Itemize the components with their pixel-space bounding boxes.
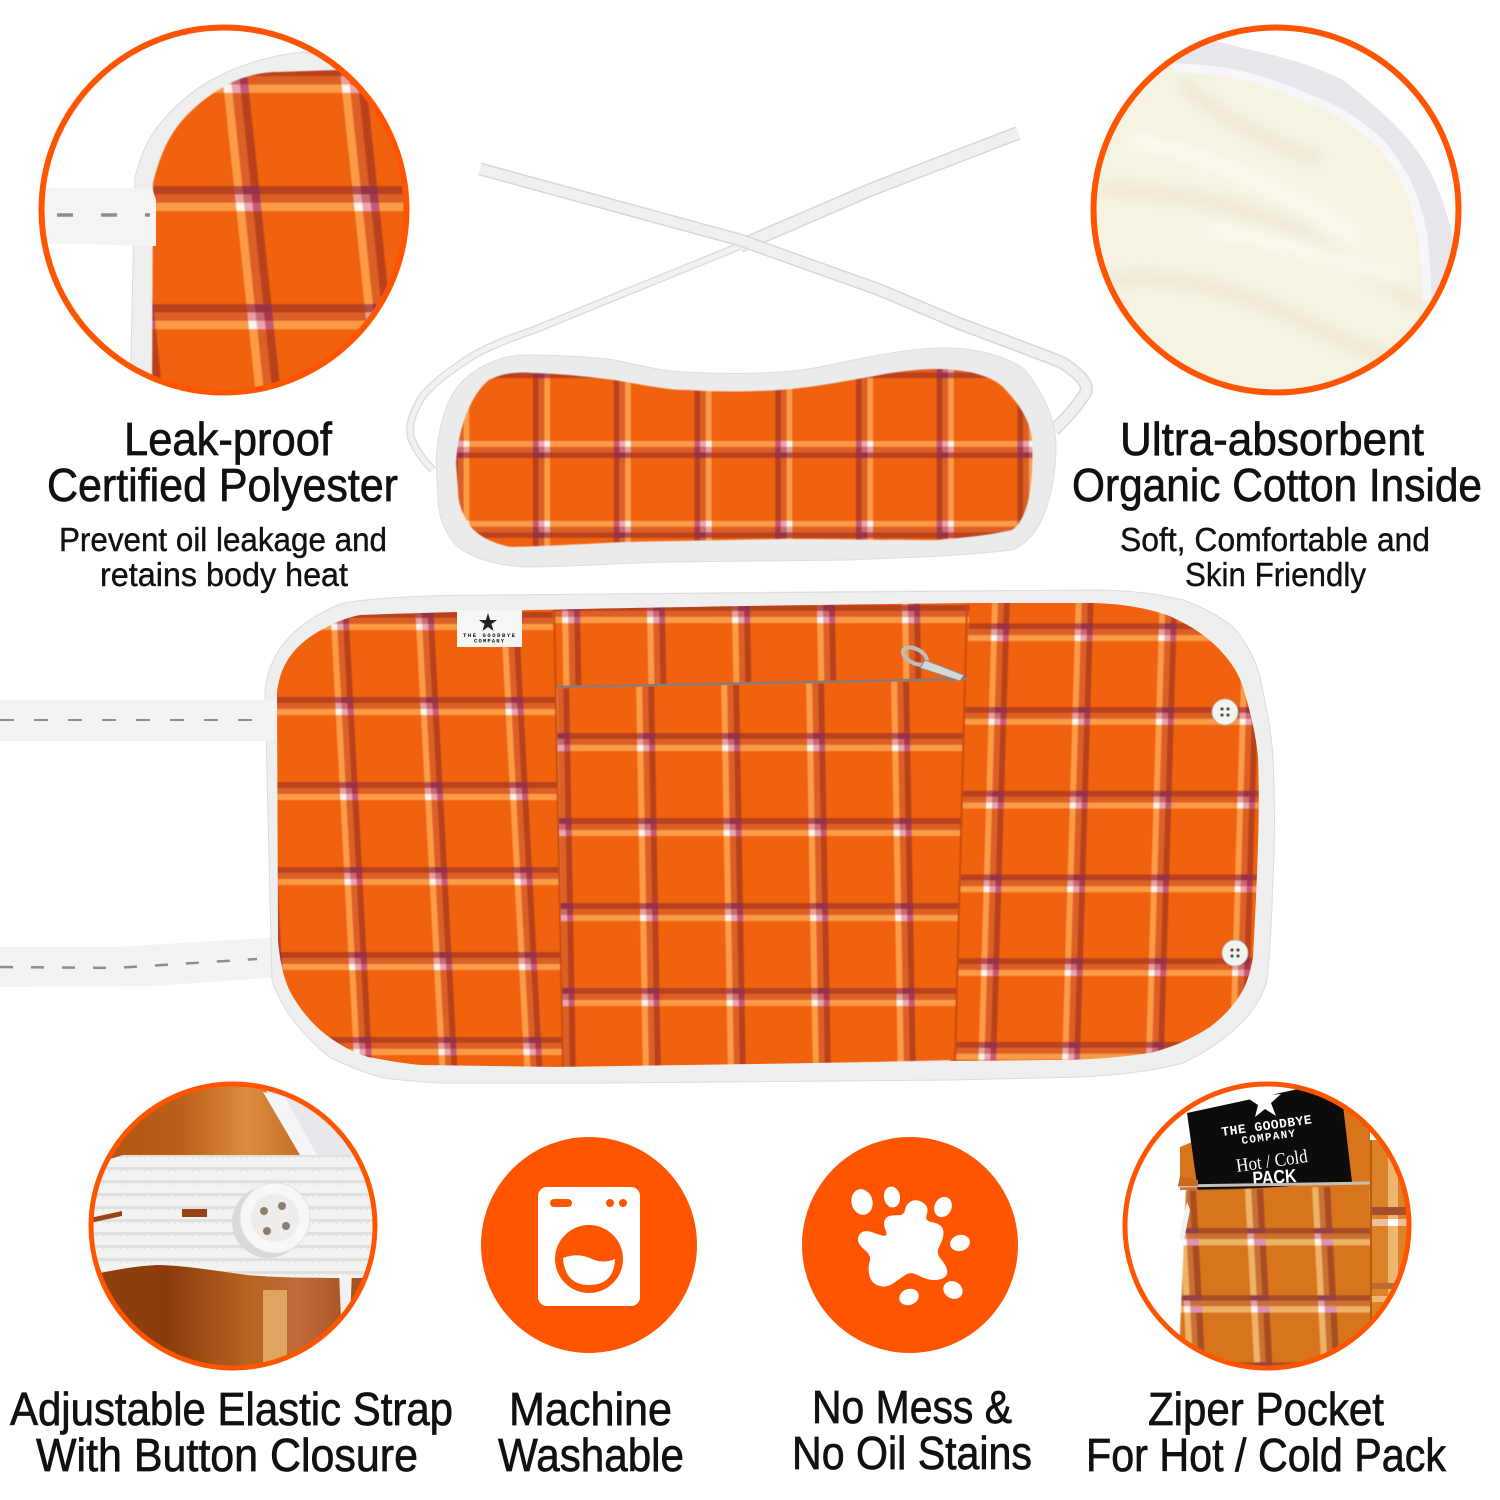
heading: zipper pocket: Ziper Pocket xyxy=(1148,1383,1384,1435)
heading: no mess no oil stains xyxy=(792,1381,1032,1479)
heading: leak-proof polyester: Certified Polyester xyxy=(47,459,398,511)
heading: machine washable: Machine xyxy=(509,1383,672,1435)
small belt binding xyxy=(436,348,1056,567)
text: polyester description: Prevent oil leakage and xyxy=(59,521,387,558)
heading: zipper pocket: For Hot / Cold Pack xyxy=(1086,1429,1447,1481)
text: polyester description: retains body heat xyxy=(100,556,348,593)
text: cotton description xyxy=(1120,521,1430,593)
sewn brand label: COMPANY xyxy=(474,638,505,644)
black cold pack card: COMPANY xyxy=(1241,1129,1296,1148)
zipper pull xyxy=(900,644,964,681)
strap: lower elastic xyxy=(0,937,282,987)
heading: no mess no oil stains: No Mess & xyxy=(812,1381,1012,1433)
white binding xyxy=(265,590,1274,1083)
black cold pack card xyxy=(1187,1080,1352,1192)
button bottom xyxy=(1222,940,1248,966)
icon: washing machine xyxy=(481,1137,697,1353)
heading: ultra-absorbent cotton xyxy=(1072,413,1482,511)
text: cotton description: Soft, Comfortable and xyxy=(1120,521,1430,558)
heading: leak-proof polyester xyxy=(47,413,398,511)
text: polyester description xyxy=(59,521,387,593)
strap joins over binding xyxy=(262,700,280,741)
strap: upper elastic xyxy=(0,700,282,741)
callout circle: elastic strap and button xyxy=(85,1080,385,1380)
heading: zipper pocket xyxy=(1086,1383,1447,1481)
callout circle: polyester detail xyxy=(30,20,430,400)
heading: leak-proof polyester: Leak-proof xyxy=(124,413,332,465)
heading: machine washable: Washable xyxy=(498,1429,684,1481)
callout circle: organic cotton detail xyxy=(1085,20,1480,400)
sewn brand label: THE GOODBYE xyxy=(463,632,516,639)
plaid fabric panels xyxy=(270,600,1270,1080)
icon: oil splat xyxy=(802,1137,1018,1353)
ties xyxy=(410,133,1086,470)
photo: main open belt xyxy=(0,590,1274,1083)
heading: machine washable xyxy=(498,1383,684,1481)
callout circle: zipper pocket with cold pack xyxy=(1120,1080,1420,1380)
heading: adjustable elastic strap: Adjustable Elastic Strap xyxy=(10,1383,453,1435)
small belt fabric xyxy=(456,369,1032,547)
sewn brand label xyxy=(457,610,522,647)
black cold pack card: THE GOODBYE xyxy=(1220,1112,1313,1140)
photo: small belt with cross ties xyxy=(410,133,1086,567)
heading: ultra-absorbent cotton: Ultra-absorbent xyxy=(1120,413,1424,465)
button top xyxy=(1212,699,1238,725)
heading: adjustable elastic strap xyxy=(10,1383,453,1481)
heading: adjustable elastic strap: With Button Closure xyxy=(36,1429,418,1481)
zipper line xyxy=(556,679,966,687)
text: cotton description: Skin Friendly xyxy=(1185,556,1366,593)
heading: no mess no oil stains: No Oil Stains xyxy=(792,1427,1032,1479)
black cold pack card: PACK xyxy=(1252,1166,1297,1190)
black cold pack card: Hot / Cold xyxy=(1235,1146,1309,1177)
pocket plaid xyxy=(1178,1186,1373,1380)
